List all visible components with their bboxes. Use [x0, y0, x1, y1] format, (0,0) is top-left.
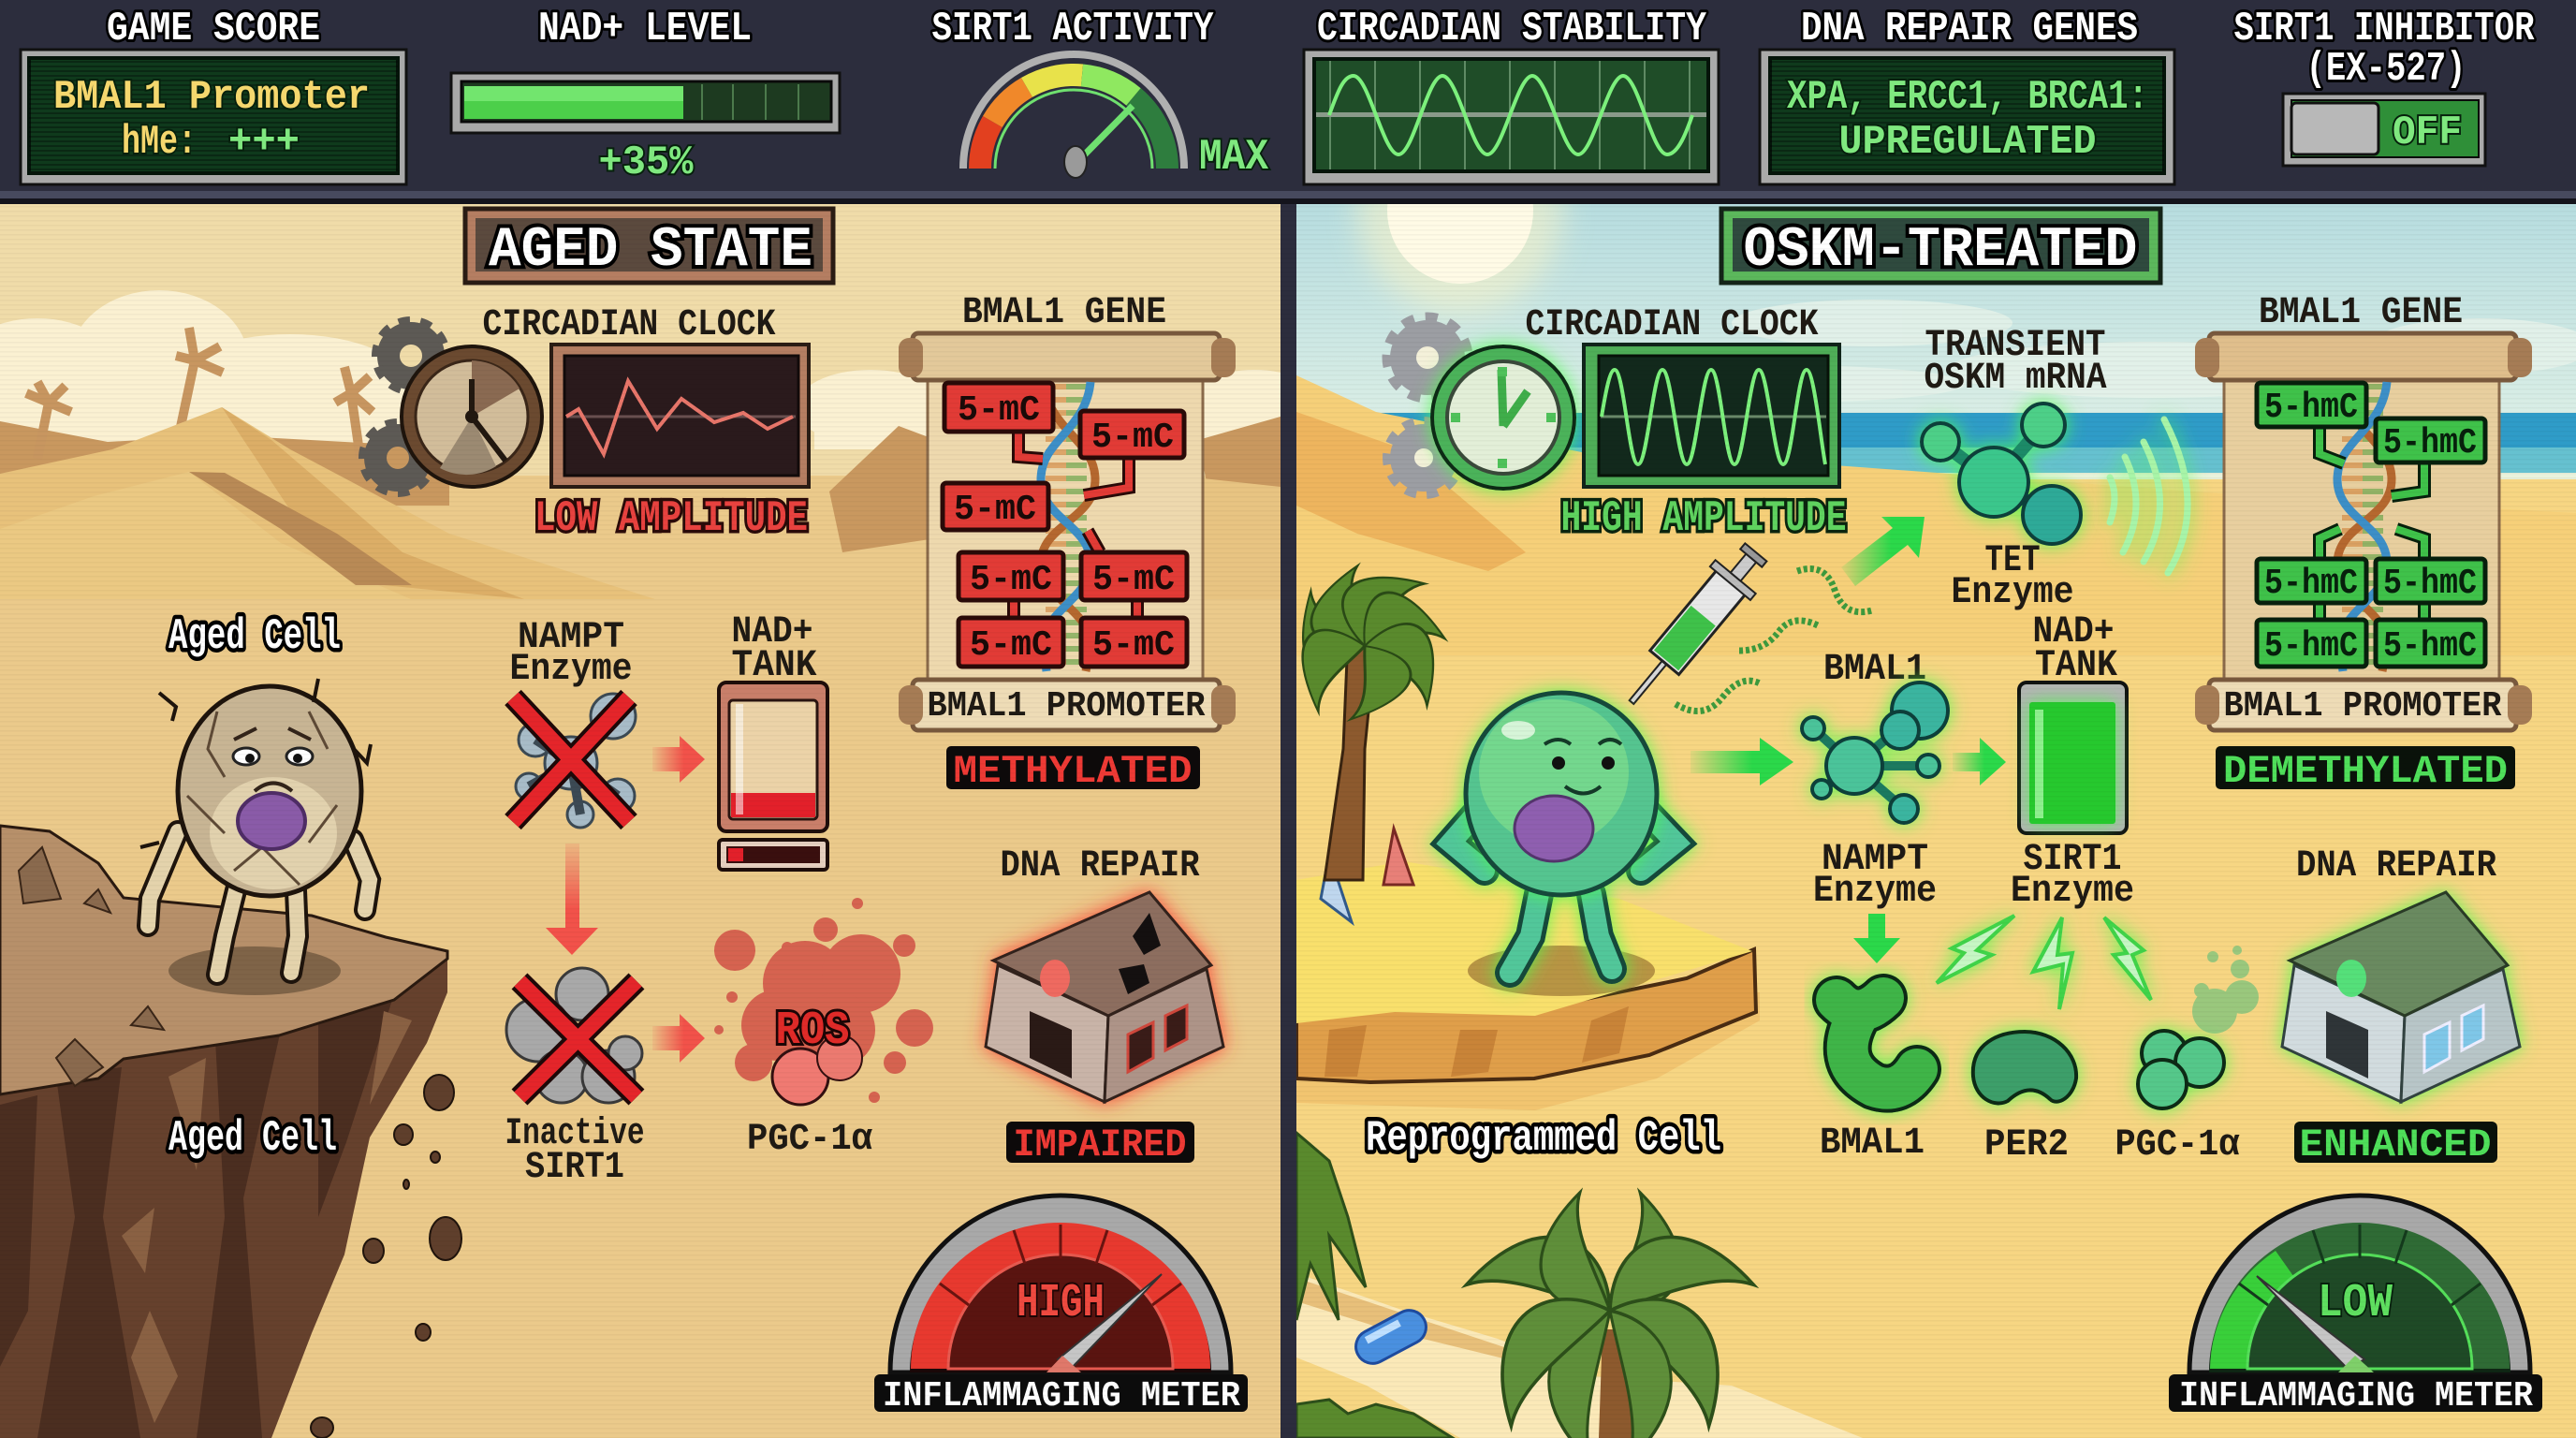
demethylated badge: [2216, 746, 2515, 789]
TET enzyme: TRANSIENT: [1925, 325, 2106, 367]
treated BMAL1 gene scroll: BMAL1 GENE: [2259, 292, 2463, 334]
aged inflammaging meter: [874, 1196, 1248, 1416]
green spores: [2192, 946, 2259, 1034]
icon: inactive molecule with X: [516, 694, 636, 828]
aged NAMPT enzyme: Enzyme: [509, 649, 633, 691]
background: clouds: [1732, 300, 2576, 401]
arrow: green to TET: [1841, 517, 1925, 586]
treated inflammaging meter: INFLAMMAGING METER: [2179, 1376, 2533, 1416]
icon: broken clock: [402, 346, 542, 487]
5-hmC tags: [2257, 383, 2485, 667]
aged BMAL1 gene scroll: 5-mC: [954, 490, 1036, 530]
treated DNA repair house: DNA REPAIR: [2296, 845, 2496, 888]
circadian stability oscilloscope: CIRCADIAN STABILITY: [1317, 6, 1706, 52]
background: sand shore: [1296, 375, 2576, 655]
5-mC tags: [943, 383, 1187, 667]
aged BMAL1 gene scroll: [899, 292, 1236, 794]
aged circadian clock: CIRCADIAN CLOCK: [483, 304, 775, 346]
surfboards: [1321, 829, 1413, 922]
PER2 blob: [1973, 1032, 2076, 1103]
arrow: green to BMAL1: [1690, 738, 1793, 785]
cliff: [0, 826, 461, 1438]
icon: healthy clock: [1432, 346, 1574, 489]
aged circadian clock: LOW AMPLITUDE: [534, 494, 808, 543]
methylated badge: [946, 746, 1200, 789]
DNA helix: [2337, 382, 2392, 671]
NAD+ level bar: [451, 6, 840, 186]
background: main dune: [0, 407, 654, 599]
treated NAD+ tank: NAD+: [2033, 611, 2114, 653]
treated BMAL1 gene scroll: 5-hmC: [2264, 564, 2358, 604]
treated NAD+ tank: Enzyme: [2011, 871, 2134, 913]
treated DNA repair house: [2282, 845, 2520, 1167]
DNA repair genes display: XPA, ERCC1, BRCA1:: [1787, 74, 2148, 121]
label: aged cell top: Aged Cell: [168, 612, 341, 661]
panel: OSKM treated beach: [1296, 108, 2576, 1438]
aged BMAL1 gene scroll: BMAL1 GENE: [962, 292, 1166, 334]
SIRT1 inhibitor toggle: OFF: [2393, 110, 2462, 156]
SIRT1 inhibitor toggle: (EX-527): [2306, 46, 2466, 93]
treated NAD+ tank: SIRT1: [2024, 839, 2121, 881]
aged oscilloscope: [551, 345, 809, 487]
inactive SIRT1: SIRT1: [525, 1147, 624, 1189]
TET enzyme: [1922, 325, 2188, 614]
waves: [2110, 419, 2188, 573]
treated BMAL1 gene scroll: 5-hmC: [2264, 626, 2358, 667]
aged circadian clock: [363, 304, 809, 543]
ROS cloud: PGC-1α: [747, 1119, 872, 1161]
aged BMAL1 gene scroll: 5-mC: [970, 560, 1052, 600]
icon: rusty gears: [363, 321, 446, 492]
5-mC connectors: [1014, 432, 1137, 618]
scroll parchment: BMAL1 PROMOTER: [2224, 686, 2502, 726]
aged BMAL1 gene scroll: 5-mC: [958, 390, 1040, 431]
panel divider: [1281, 204, 1296, 1438]
aged DNA repair house: DNA REPAIR: [1000, 845, 1200, 888]
inactive SIRT1: [505, 968, 644, 1189]
ROS cloud: ROS: [775, 1005, 850, 1058]
treated circadian clock: HIGH AMPLITUDE: [1561, 494, 1846, 543]
background: palm silhouettes: [24, 327, 376, 443]
treated BMAL1 molecule: [1802, 649, 1948, 913]
treated inflammaging meter: LOW: [2318, 1277, 2393, 1330]
protein blobs: PER2: [1984, 1124, 2069, 1167]
protein blobs: [1820, 946, 2259, 1167]
background: beach patches: [1296, 1273, 1863, 1438]
palm tree front: [1462, 1193, 1758, 1438]
icon: syringe: [1611, 536, 1776, 719]
aged DNA repair house: [986, 845, 1223, 1167]
pill: [1354, 1309, 1427, 1365]
NAD+ level bar: +35%: [599, 139, 694, 186]
treated circadian clock: [1387, 304, 1846, 543]
background: sun: [1346, 204, 1574, 321]
SIRT1 inhibitor toggle: [2233, 6, 2535, 166]
OSKM-treated title: OSKM-TREATED: [1743, 219, 2138, 283]
background: clouds: [0, 290, 1320, 449]
icon: broken house: [986, 892, 1223, 1102]
aged state title: AGED STATE: [489, 219, 812, 283]
protein blobs: BMAL1: [1820, 1123, 1925, 1165]
icon: TET molecule: [1922, 404, 2081, 544]
DNA repair genes display: UPREGULATED: [1838, 119, 2097, 166]
treated NAD+ tank: [2011, 611, 2134, 913]
BMAL1 blob: [1837, 998, 1917, 1089]
icon: repaired house: [2282, 892, 2520, 1102]
aged DNA repair house: IMPAIRED: [1013, 1123, 1187, 1167]
aged BMAL1 gene scroll: 5-mC: [1092, 625, 1175, 666]
SIRT1 activity gauge: SIRT1 ACTIVITY: [932, 6, 1214, 52]
NAD+ level bar: NAD+ LEVEL: [538, 6, 752, 52]
character: reprogrammed cell: [1451, 693, 1676, 973]
inactive SIRT1: Inactive: [505, 1113, 644, 1155]
aged NAD+ tank: [719, 611, 827, 870]
DNA repair genes display: [1760, 6, 2174, 184]
treated BMAL1 molecule: BMAL1: [1823, 649, 1926, 691]
PGC-1a blob: [2138, 1031, 2224, 1108]
treated BMAL1 molecule: NAMPT: [1822, 839, 1928, 881]
treated BMAL1 gene scroll: 5-hmC: [2264, 388, 2358, 428]
game score panel: GAME SCORE: [107, 6, 320, 52]
falling rocks: [311, 1075, 461, 1438]
palm fronds at left edge: [1296, 1133, 1453, 1438]
SIRT1 activity gauge: MAX: [1199, 133, 1268, 182]
icon: grey blob: [506, 968, 642, 1103]
arrow: green to NAD tank: [1953, 738, 2006, 785]
scroll parchment: [2195, 333, 2532, 730]
panel: aged state desert: [0, 204, 1320, 1438]
lightning bolts: [1937, 916, 2151, 1009]
treated BMAL1 gene scroll: DEMETHYLATED: [2223, 749, 2508, 794]
label: reprogrammed cell: Reprogrammed Cell: [1366, 1114, 1721, 1163]
arrow: red down to SIRT1: [546, 844, 598, 955]
aged BMAL1 gene scroll: 5-mC: [970, 625, 1052, 666]
treated BMAL1 gene scroll: 5-hmC: [2383, 423, 2477, 463]
arrow: red to NAD tank: [652, 736, 705, 783]
treated DNA repair house: ENHANCED: [2299, 1123, 2492, 1167]
DNA helix: [1041, 382, 1095, 671]
aged inflammaging meter: HIGH: [1017, 1277, 1105, 1330]
treated BMAL1 molecule: Enzyme: [1813, 871, 1937, 913]
icon: clean gears: [1387, 317, 1468, 494]
aged BMAL1 gene scroll: 5-mC: [1091, 418, 1174, 458]
scroll parchment: BMAL1 PROMOTER: [927, 686, 1206, 726]
scroll parchment: [899, 333, 1236, 730]
treated BMAL1 gene scroll: 5-hmC: [2383, 626, 2477, 667]
background: distant dunes: [0, 417, 1281, 552]
aged BMAL1 gene scroll: 5-mC: [1092, 560, 1175, 600]
circadian stability oscilloscope: [1304, 6, 1719, 184]
mRNA strands: [1676, 569, 1872, 712]
aged BMAL1 gene scroll: METHYLATED: [953, 749, 1193, 794]
background: sea: [1381, 413, 2576, 448]
palm tree on island: [1301, 562, 1449, 882]
label: aged cell bottom: Aged Cell: [168, 1114, 337, 1163]
TET enzyme: TET: [1984, 540, 2041, 582]
SIRT1 activity gauge: [932, 6, 1268, 182]
treated NAD+ tank: TANK: [2035, 645, 2117, 687]
aged NAD+ tank: NAD+: [732, 611, 812, 653]
aged inflammaging meter: INFLAMMAGING METER: [883, 1376, 1240, 1416]
protein blobs: PGC-1α: [2115, 1124, 2239, 1167]
arrow: green down to BMAL1: [1853, 914, 1900, 963]
island: [1296, 829, 1760, 1110]
arrow: red to ROS: [652, 1014, 705, 1063]
aged NAD+ tank: TANK: [732, 645, 816, 687]
game score panel: hMe:: [122, 119, 197, 166]
aged NAMPT enzyme: NAMPT: [518, 617, 624, 659]
DNA repair genes display: DNA REPAIR GENES: [1801, 6, 2138, 52]
character: aged cell: [140, 679, 371, 975]
TET enzyme: OSKM mRNA: [1925, 358, 2106, 400]
5-hmC connectors: [2320, 427, 2424, 620]
header bar: [0, 0, 2576, 204]
game score panel: BMAL1 Promoter: [53, 74, 370, 121]
healthy oscilloscope: [1584, 345, 1839, 487]
aged NAMPT enzyme: [509, 617, 636, 828]
treated BMAL1 gene scroll: 5-hmC: [2383, 564, 2477, 604]
treated BMAL1 gene scroll: [2195, 292, 2532, 794]
game score panel: [21, 6, 406, 184]
treated circadian clock: CIRCADIAN CLOCK: [1526, 304, 1818, 346]
game score panel: +++: [228, 119, 300, 166]
ROS cloud: [714, 898, 933, 1161]
TET enzyme: Enzyme: [1951, 572, 2074, 614]
treated inflammaging meter: [2169, 1196, 2542, 1416]
